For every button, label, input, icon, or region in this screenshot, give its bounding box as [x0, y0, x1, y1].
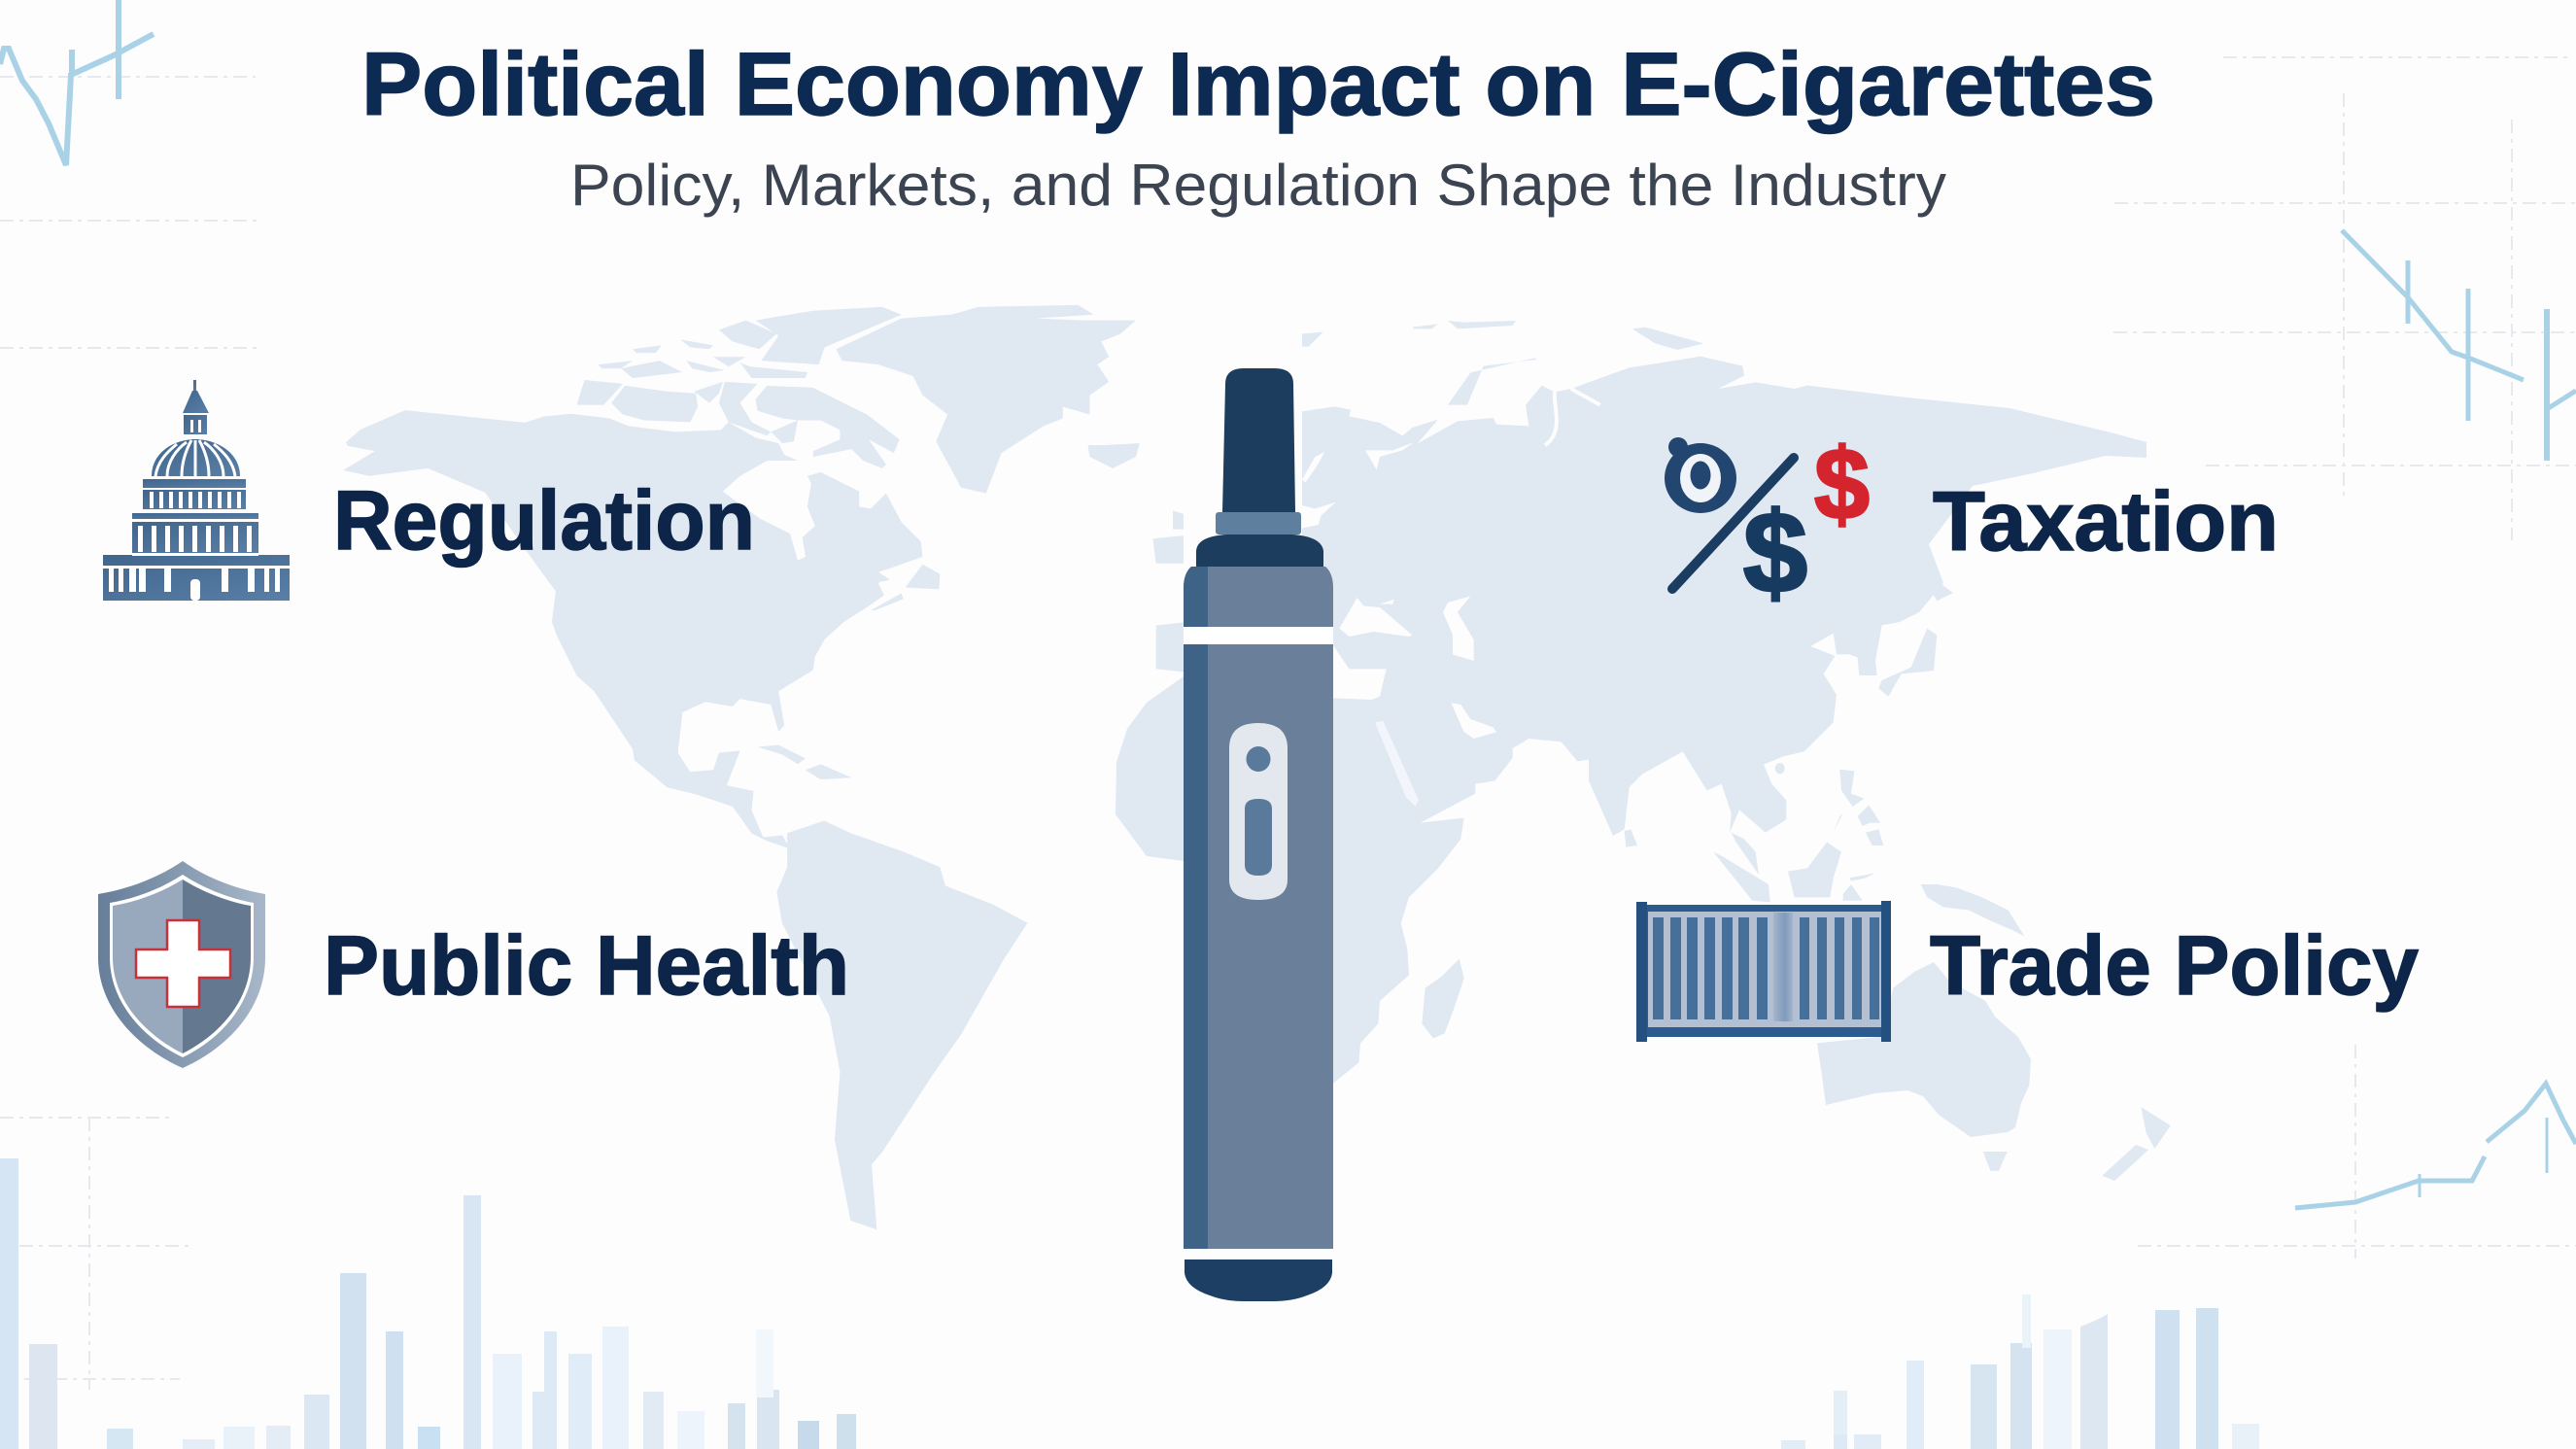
background line chart: bottom right	[2295, 1084, 2576, 1208]
icon: shield with medical cross	[98, 861, 265, 1068]
icon: tax percent and dollar signs: $	[1743, 489, 1807, 617]
world map background	[343, 305, 2171, 1229]
icon: tax percent and dollar signs	[1665, 429, 1870, 617]
label: Public Health: Public Health	[324, 919, 849, 1013]
background line chart: top left	[0, 0, 154, 165]
label: Regulation: Regulation	[333, 474, 755, 568]
label: Taxation: Taxation	[1933, 475, 2279, 569]
central e-cigarette device	[1184, 368, 1333, 1301]
icon: tax percent and dollar signs: $	[1814, 429, 1870, 541]
title: Political Economy Impact on E-Cigarettes	[361, 35, 2155, 134]
background bar chart: bottom right	[1781, 1294, 2259, 1449]
label: Trade Policy: Trade Policy	[1930, 919, 2419, 1013]
background line chart: top right	[2342, 230, 2576, 461]
icon: capitol building	[103, 380, 290, 601]
background bar chart: bottom left	[0, 1158, 856, 1449]
subtitle: Policy, Markets, and Regulation Shape the Industry	[570, 153, 1946, 218]
icon: shipping container	[1636, 901, 1891, 1042]
